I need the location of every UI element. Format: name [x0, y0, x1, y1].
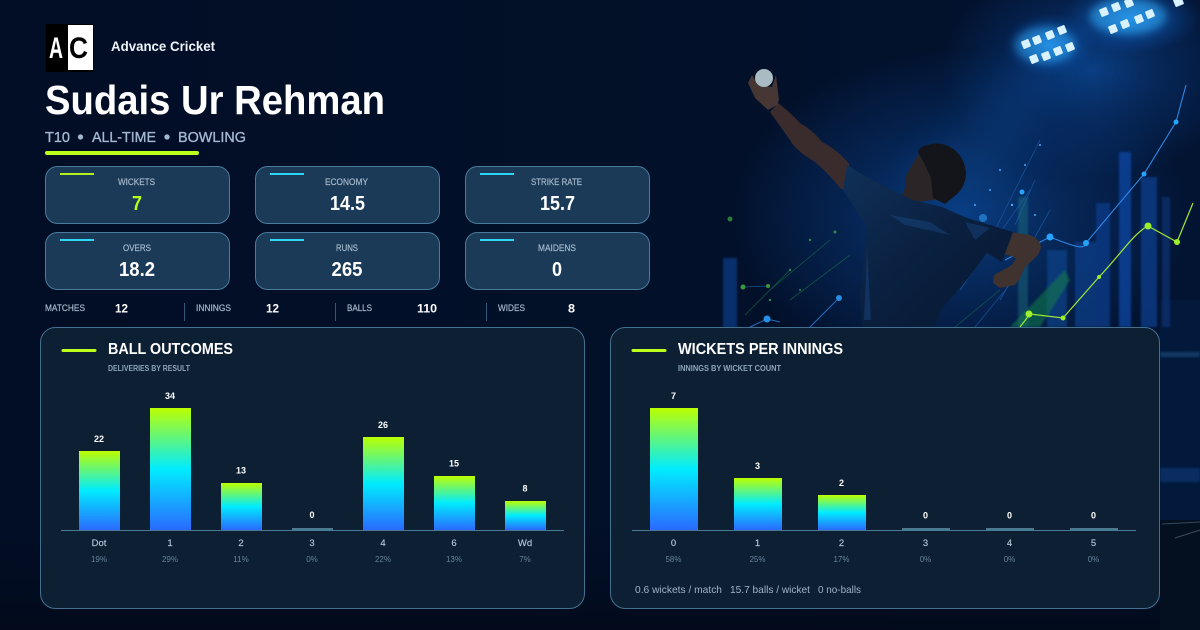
bar chart: wickets per innings: 25%: [749, 555, 766, 564]
bar chart: ball outcomes: 11%: [233, 555, 249, 564]
brand name: Advance Cricket: [111, 38, 215, 54]
bar chart: wickets per innings: 3: [755, 461, 760, 471]
heading: WICKETS PER INNINGS: [678, 341, 843, 358]
bar chart: ball outcomes: 8: [522, 484, 528, 494]
secondary stats row: 12: [115, 302, 128, 316]
stat card: strike rate: STRIKE RATE: [531, 177, 582, 187]
stat card: maidens: MAIDENS: [538, 243, 576, 253]
secondary stats row: BALLS: [347, 303, 372, 313]
subheading: DELIVERIES BY RESULT: [108, 364, 190, 373]
logo: AC: [46, 24, 94, 72]
heading accent: [633, 349, 665, 352]
stat card: runs: RUNS: [336, 243, 358, 253]
secondary stats row: 8: [568, 302, 575, 316]
bar chart: ball outcomes: 1: [167, 538, 173, 549]
bar chart: ball outcomes: 2: [238, 538, 244, 549]
bar chart: ball outcomes: 0: [309, 510, 315, 520]
stat card: overs: 18.2: [119, 259, 155, 281]
bar chart: wickets per innings: 4: [1007, 538, 1012, 549]
bar chart: wickets per innings: 7: [671, 391, 676, 401]
bar chart: wickets per innings: 0%: [920, 555, 931, 564]
subtitle: [45, 129, 246, 146]
bar chart: wickets per innings: 5: [1091, 538, 1096, 549]
bar chart: wickets per innings: 0: [671, 538, 676, 549]
bar chart: wickets per innings: 0%: [1004, 555, 1015, 564]
hand: [748, 75, 779, 110]
bar chart: ball outcomes: 22: [94, 434, 104, 444]
bar chart: wickets per innings: 1: [755, 538, 760, 549]
background data bars: [723, 152, 1170, 328]
stat card: economy: 14.5: [330, 193, 365, 215]
bar chart: wickets per innings: 0%: [1088, 555, 1099, 564]
bar chart: wickets per innings: 2: [839, 538, 844, 549]
footnote stats: 15.7 balls / wicket: [730, 584, 810, 596]
footnote stats: 0.6 wickets / match: [635, 584, 722, 596]
stat card: wickets: WICKETS: [118, 177, 155, 187]
stat card: wickets: [46, 166, 230, 224]
bar chart: ball outcomes: 7%: [519, 555, 531, 564]
heading accent: [63, 349, 95, 352]
bar chart: wickets per innings: [632, 391, 1136, 564]
stat card: runs: [256, 232, 440, 290]
background trend lines: [743, 85, 1193, 327]
secondary stats row: INNINGS: [196, 303, 231, 313]
heading: BALL OUTCOMES: [108, 341, 233, 358]
subtitle: T10: [45, 129, 70, 146]
bar chart: wickets per innings: 3: [923, 538, 928, 549]
bar chart: ball outcomes: 19%: [91, 555, 107, 564]
hair: [918, 144, 966, 204]
bar chart: ball outcomes: 6: [451, 538, 457, 549]
shirt highlights: [864, 215, 990, 320]
subtitle: BOWLING: [178, 129, 246, 146]
stat card: wickets: 7: [132, 193, 142, 215]
footnote stats: [635, 584, 861, 596]
subheading: INNINGS BY WICKET COUNT: [678, 364, 781, 373]
panel: ball outcomes: [40, 328, 584, 608]
logo: AC: A: [49, 32, 63, 65]
bar chart: ball outcomes: 13%: [446, 555, 462, 564]
bar chart: ball outcomes: 4: [380, 538, 386, 549]
bar chart: ball outcomes: 26: [378, 420, 388, 430]
bar chart: ball outcomes: 34: [165, 391, 175, 401]
figure: bowler: [748, 69, 1041, 327]
bar chart: wickets per innings: 0: [923, 510, 928, 520]
throwing arm: [770, 103, 850, 190]
bar chart: ball outcomes: 0%: [306, 555, 318, 564]
stat card: economy: ECONOMY: [325, 177, 368, 187]
shirt: [843, 165, 1013, 327]
secondary stats row: 12: [266, 302, 279, 316]
icon: stadium floodlights: [1015, 0, 1184, 64]
subtitle: ALL-TIME: [92, 129, 156, 146]
stat card: strike rate: 15.7: [540, 193, 575, 215]
title accent line: [47, 151, 197, 155]
title: Sudais Ur Rehman: [45, 77, 385, 123]
bar chart: ball outcomes: 22%: [375, 555, 391, 564]
bar chart: ball outcomes: 15: [449, 458, 459, 468]
bar chart: ball outcomes: Dot: [92, 538, 107, 549]
secondary stats row: MATCHES: [45, 303, 85, 313]
stat card: overs: OVERS: [123, 243, 151, 253]
bar chart: wickets per innings: 0: [1091, 510, 1096, 520]
bar chart: ball outcomes: 29%: [162, 555, 178, 564]
bar chart: ball outcomes: Wd: [518, 538, 532, 549]
secondary stats row: 110: [417, 302, 437, 316]
bar chart: wickets per innings: 17%: [833, 555, 850, 564]
stat card: economy: [256, 166, 440, 224]
secondary stats row: WIDES: [498, 303, 525, 313]
ball: [755, 69, 773, 87]
logo: AC: C: [69, 32, 88, 65]
bowling-side arm: [993, 232, 1041, 288]
stat card: maidens: [466, 232, 650, 290]
bar chart: wickets per innings: 58%: [665, 555, 682, 564]
stat card: runs: 265: [332, 259, 362, 281]
bar chart: ball outcomes: 13: [236, 466, 246, 476]
background data points: [728, 120, 1180, 322]
neck and face: [902, 155, 935, 202]
bar chart: wickets per innings: 2: [839, 478, 844, 488]
bar chart: ball outcomes: [61, 391, 564, 564]
bar chart: wickets per innings: 0: [1007, 510, 1012, 520]
bar chart: ball outcomes: 3: [309, 538, 315, 549]
stat card: maidens: 0: [552, 259, 562, 281]
stat card: strike rate: [466, 166, 650, 224]
panel: wickets per innings: [610, 328, 1160, 608]
secondary stats row: [45, 302, 575, 321]
footnote stats: 0 no-balls: [818, 584, 861, 596]
stat card: overs: [46, 232, 230, 290]
